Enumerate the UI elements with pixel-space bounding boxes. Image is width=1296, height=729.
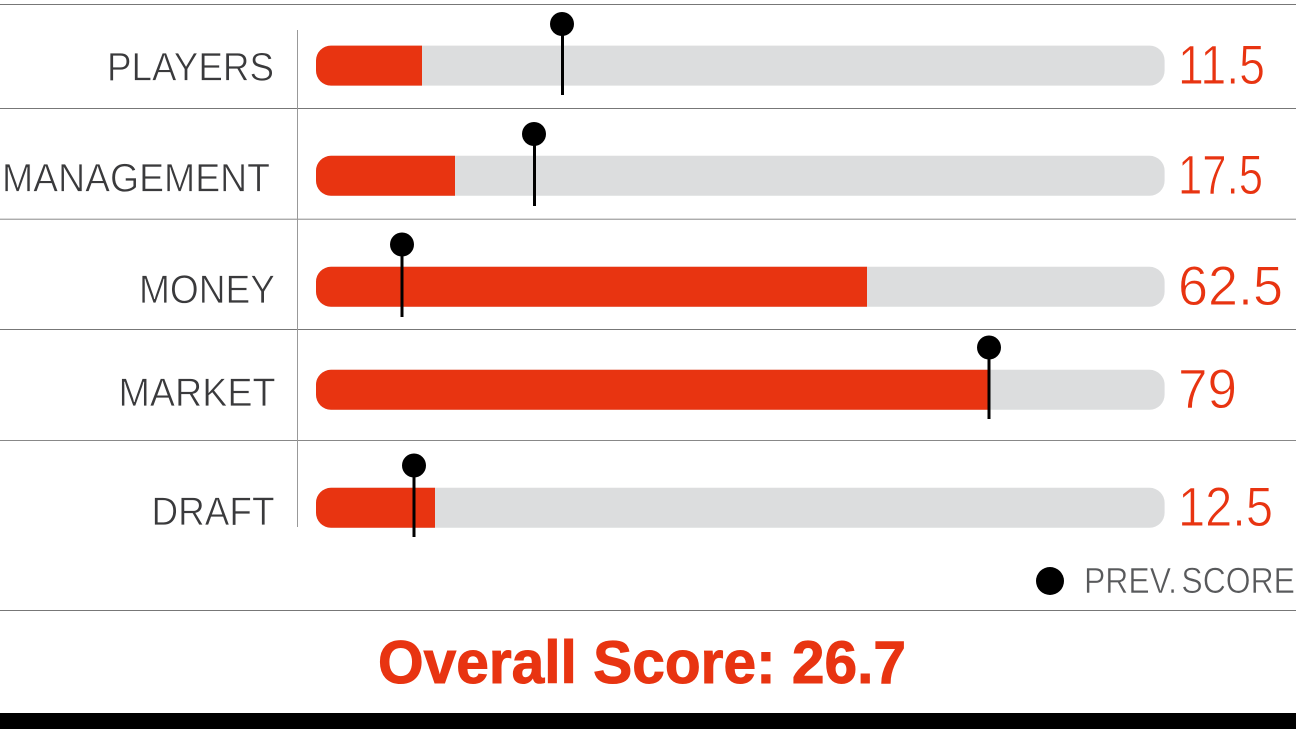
row: draft: DRAFT (152, 490, 274, 534)
row: players (107, 12, 1265, 96)
bottom black bar (0, 713, 1296, 729)
row: money (139, 232, 1283, 317)
row: market: MARKET (118, 371, 276, 415)
row: players: PLAYERS (107, 46, 274, 90)
row: market (118, 336, 1237, 420)
overall score: Overall Score: 26.7 (378, 629, 906, 696)
row: draft: 12.5 (1178, 475, 1273, 538)
row: players: 11.5 (1178, 33, 1265, 96)
row: money: MONEY (139, 268, 275, 312)
row: market: 79 (1178, 357, 1237, 420)
row: management: 17.5 (1178, 143, 1263, 206)
row: draft (152, 454, 1273, 538)
row: management: MANAGEMENT (2, 156, 270, 200)
row: money: 62.5 (1178, 254, 1283, 317)
row: management (2, 122, 1263, 206)
